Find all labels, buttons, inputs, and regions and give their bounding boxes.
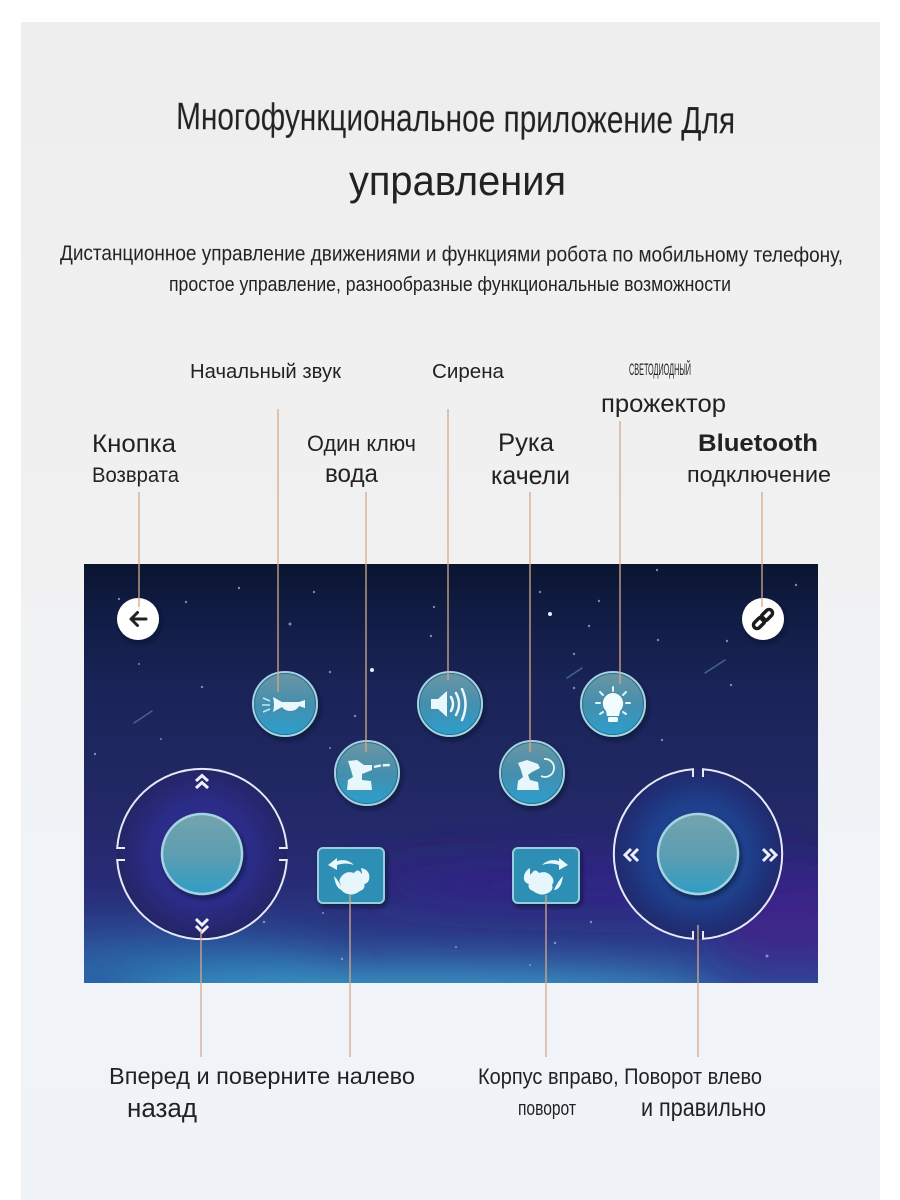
label: back button [92,430,179,487]
label: forward and backward [109,1063,415,1123]
button: body turn right [513,848,579,903]
subtitle text block [60,241,843,296]
label: body turn and rotation [478,1064,766,1122]
button: body turn left [318,848,384,903]
up arrows [196,776,208,788]
label: siren: Сирена [432,361,505,383]
knob [658,814,738,894]
button: water spray [335,741,399,805]
bluetooth link button [742,598,784,640]
button: light bulb [581,672,645,736]
ring [117,769,287,939]
ring [614,769,782,939]
label: back button: Возврата [92,464,179,487]
right arrows [763,849,776,861]
label: swing arm [491,429,570,490]
label: swing arm: качели [491,460,570,490]
label: back button: Кнопка [92,430,176,458]
label: LED spotlight: прожектор [601,390,726,418]
title: Многофункциональное приложение Для [176,96,735,142]
label: body turn and rotation: поворот [518,1098,576,1120]
label: one key water [307,431,416,488]
stars [94,569,797,966]
button: speaker siren [418,672,482,736]
title: управления [349,157,566,204]
label: swing arm: Рука [498,429,554,457]
label: start sound: Начальный звук [190,361,341,383]
label: LED spotlight [601,360,726,418]
label: one key water: Один ключ [307,431,416,456]
label: forward and backward: Вперед и поверните налево [109,1063,415,1089]
back button [117,598,159,640]
knob [162,814,242,894]
button: horn [253,672,317,736]
label: one key water: вода [325,460,378,488]
title [176,96,735,204]
button: arm swing [500,741,564,805]
app screenshot panel [84,564,818,983]
subtitle text block: простое управление, разнообразные функциональные возможности [169,274,731,296]
label: bluetooth: подключение [687,462,831,487]
left arrows [625,849,638,861]
label: bluetooth: Bluetooth [698,430,818,457]
label: body turn and rotation: Корпус вправо, Поворот влево [478,1064,762,1089]
callout leader lines [139,409,762,1057]
label: body turn and rotation: и правильно [641,1094,766,1122]
right joystick [613,769,783,939]
down arrows [196,919,208,932]
shooting stars [134,660,725,723]
left joystick [117,769,287,939]
label: LED spotlight: СВЕТОДИОДНЫЙ [629,360,691,379]
label: forward and backward: назад [127,1093,197,1123]
label: bluetooth [687,430,831,487]
